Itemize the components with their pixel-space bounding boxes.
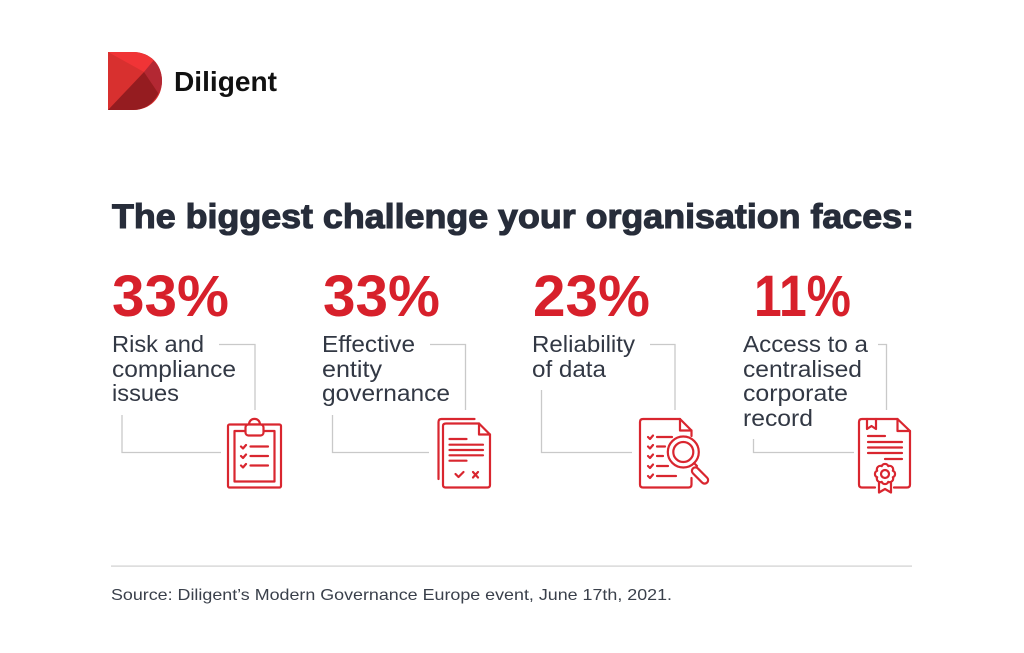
connector xyxy=(542,344,675,452)
icon: document with marks xyxy=(438,419,490,488)
statistic: 11% xyxy=(754,264,851,329)
label: Reliability xyxy=(532,331,635,357)
logo mark xyxy=(108,52,162,110)
source note: Source: Diligent’s Modern Governance Europe event, June 17th, 2021. xyxy=(111,587,672,604)
label: Risk and xyxy=(112,331,204,357)
connector xyxy=(332,344,466,452)
label: Access to a xyxy=(743,331,869,357)
title: The biggest challenge your organisation faces: xyxy=(112,198,914,236)
label: compliance xyxy=(112,356,236,382)
label: Effective xyxy=(322,331,415,357)
icon: document with magnifier xyxy=(640,419,710,488)
statistic: 23% xyxy=(533,264,650,329)
label: centralised xyxy=(743,356,862,382)
label: governance xyxy=(322,380,450,406)
logo xyxy=(108,52,277,110)
icon: clipboard xyxy=(228,419,281,488)
connector xyxy=(122,344,255,452)
label: record xyxy=(743,405,813,431)
label: issues xyxy=(112,380,179,406)
divider xyxy=(111,566,912,567)
seal xyxy=(875,464,895,484)
statistic: 33% xyxy=(112,264,229,329)
label: corporate xyxy=(743,380,848,406)
panel: entity governance xyxy=(322,264,490,488)
icon: certificate xyxy=(859,419,910,492)
statistic: 33% xyxy=(323,264,440,329)
logo wordmark: Diligent xyxy=(174,66,277,97)
panel: corporate record xyxy=(743,264,910,492)
label: entity xyxy=(322,356,382,382)
label: of data xyxy=(532,356,607,382)
connector xyxy=(754,344,886,452)
panel: reliability of data xyxy=(532,264,710,488)
panel: risk and compliance xyxy=(112,264,281,488)
